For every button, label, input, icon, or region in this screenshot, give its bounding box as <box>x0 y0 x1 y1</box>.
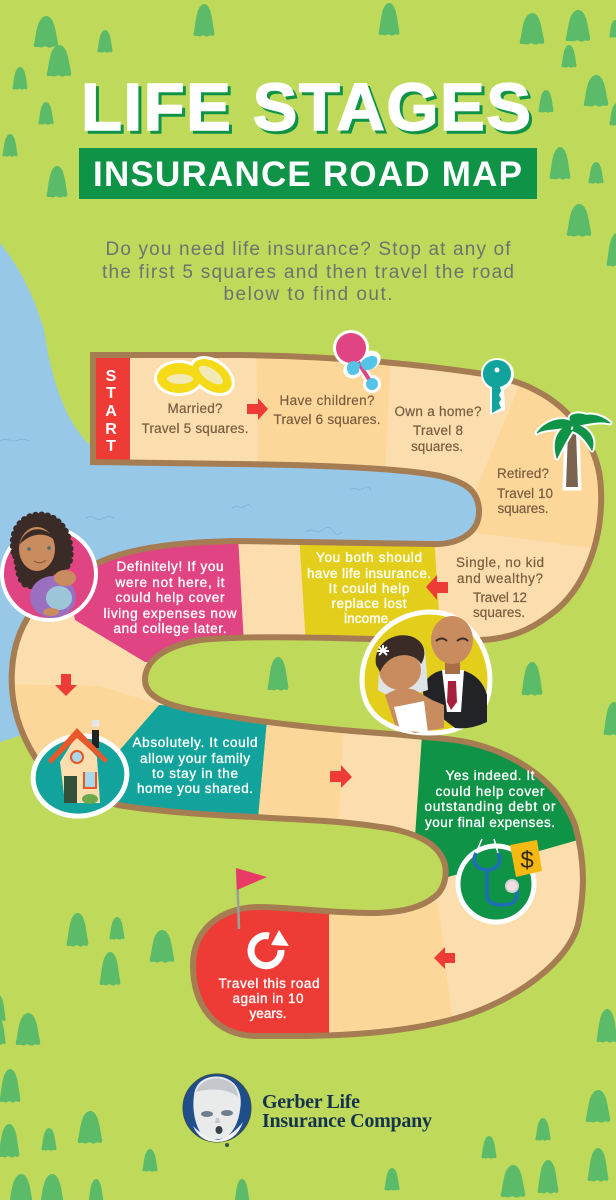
icon: house <box>28 720 132 822</box>
square: definitely: living expenses now <box>104 606 237 621</box>
square: both should have insurance: replace lost <box>332 596 407 611</box>
arrow: down 3 <box>55 674 77 696</box>
square: yes indeed: your final expenses. <box>425 815 555 830</box>
square: yes indeed: could help cover <box>436 784 545 799</box>
square: travel again: years. <box>250 1006 286 1021</box>
square: yes indeed <box>424 768 556 830</box>
square: absolutely: to stay in the <box>152 766 238 781</box>
square: single <box>456 555 544 620</box>
square: travel again: again in 10 <box>232 991 304 1006</box>
groom <box>422 616 487 728</box>
arrow: left 5 <box>434 947 455 969</box>
arrow: right 1 <box>247 398 268 420</box>
hair <box>13 515 70 586</box>
square: own a home: Own a home? <box>394 404 482 419</box>
intro text: below to find out. <box>224 284 392 305</box>
square: single: Single, no kid <box>456 555 544 570</box>
square: own a home: squares. <box>411 439 463 454</box>
square: both should have insurance: have life insurance. <box>307 566 431 581</box>
square: definitely: were not here, it <box>114 575 225 590</box>
intro text <box>102 239 514 305</box>
icon: key <box>481 358 514 415</box>
start label: R <box>105 421 117 438</box>
intro text: Do you need life insurance? Stop at any of <box>106 239 511 260</box>
subtitle banner: INSURANCE ROAD MAP <box>93 155 522 194</box>
icon: palm tree <box>537 414 610 489</box>
start label: A <box>105 403 117 420</box>
square: definitely: and college later. <box>114 621 226 636</box>
icon: repeat arrow <box>251 930 289 966</box>
square: absolutely: allow your family <box>140 751 250 766</box>
river <box>0 243 495 742</box>
square: absolutely <box>132 735 258 796</box>
baby portrait <box>183 1074 251 1142</box>
square: absolutely: home you shared. <box>137 781 253 796</box>
square: married: Travel 5 squares. <box>142 421 248 436</box>
square: yes indeed: outstanding debt or <box>424 799 556 814</box>
square: definitely: Definitely! If you <box>116 559 224 574</box>
square: married: Married? <box>168 401 222 416</box>
icon: wedding rings <box>154 348 242 404</box>
square: retired: Retired? <box>497 466 549 481</box>
square: own a home <box>394 404 482 454</box>
square: retired: squares. <box>498 501 548 516</box>
square: retired: Travel 10 <box>497 486 553 501</box>
start label <box>105 368 117 455</box>
flag <box>236 868 267 929</box>
square: definitely: could help cover <box>116 590 225 605</box>
start label: S <box>106 368 117 385</box>
intro text: the first 5 squares and then travel the road <box>102 262 514 283</box>
icon: stethoscope and bill <box>458 839 542 922</box>
road border <box>12 355 601 1036</box>
square: both should have insurance: You both should <box>316 550 422 565</box>
square: both should have insurance: income. <box>344 611 392 626</box>
square: both should have insurance <box>307 550 431 626</box>
title: LIFE STAGES <box>81 70 531 145</box>
square: retired <box>497 466 553 516</box>
icon: bride and groom <box>362 612 490 733</box>
square: travel again <box>218 976 320 1021</box>
road squares <box>0 340 616 1045</box>
square: married <box>142 401 248 436</box>
square: single: and wealthy? <box>457 571 543 586</box>
water ripples <box>0 439 371 534</box>
arrow: right 4 <box>330 765 352 788</box>
start label: T <box>106 438 116 455</box>
road board <box>0 340 616 1045</box>
square: own a home: Travel 8 <box>413 423 463 438</box>
bride <box>376 635 444 733</box>
square: both should have insurance: It could help <box>328 581 410 596</box>
bill: $ <box>520 847 534 874</box>
logo: Gerber Life <box>183 1074 432 1147</box>
road surface <box>12 355 601 1036</box>
icon: baby rattle <box>333 330 384 393</box>
start label: T <box>106 385 116 402</box>
square: single: squares. <box>473 605 525 620</box>
square: have children: Have children? <box>280 393 374 408</box>
logo: Gerber Life: Gerber Life <box>262 1091 360 1113</box>
logo: Gerber Life: Insurance Company <box>262 1110 432 1132</box>
square: have children <box>274 393 380 427</box>
square: definitely <box>104 559 237 636</box>
square: yes indeed: Yes indeed. It <box>446 768 535 783</box>
square: single: Travel 12 <box>473 590 527 605</box>
square: travel again: Travel this road <box>218 976 320 991</box>
square: have children: Travel 6 squares. <box>274 412 380 427</box>
square: absolutely: Absolutely. It could <box>132 735 258 750</box>
arrow: left 2 <box>426 575 448 600</box>
title: LIFE STAGES <box>84 73 534 148</box>
icon: mother and baby <box>2 515 96 620</box>
